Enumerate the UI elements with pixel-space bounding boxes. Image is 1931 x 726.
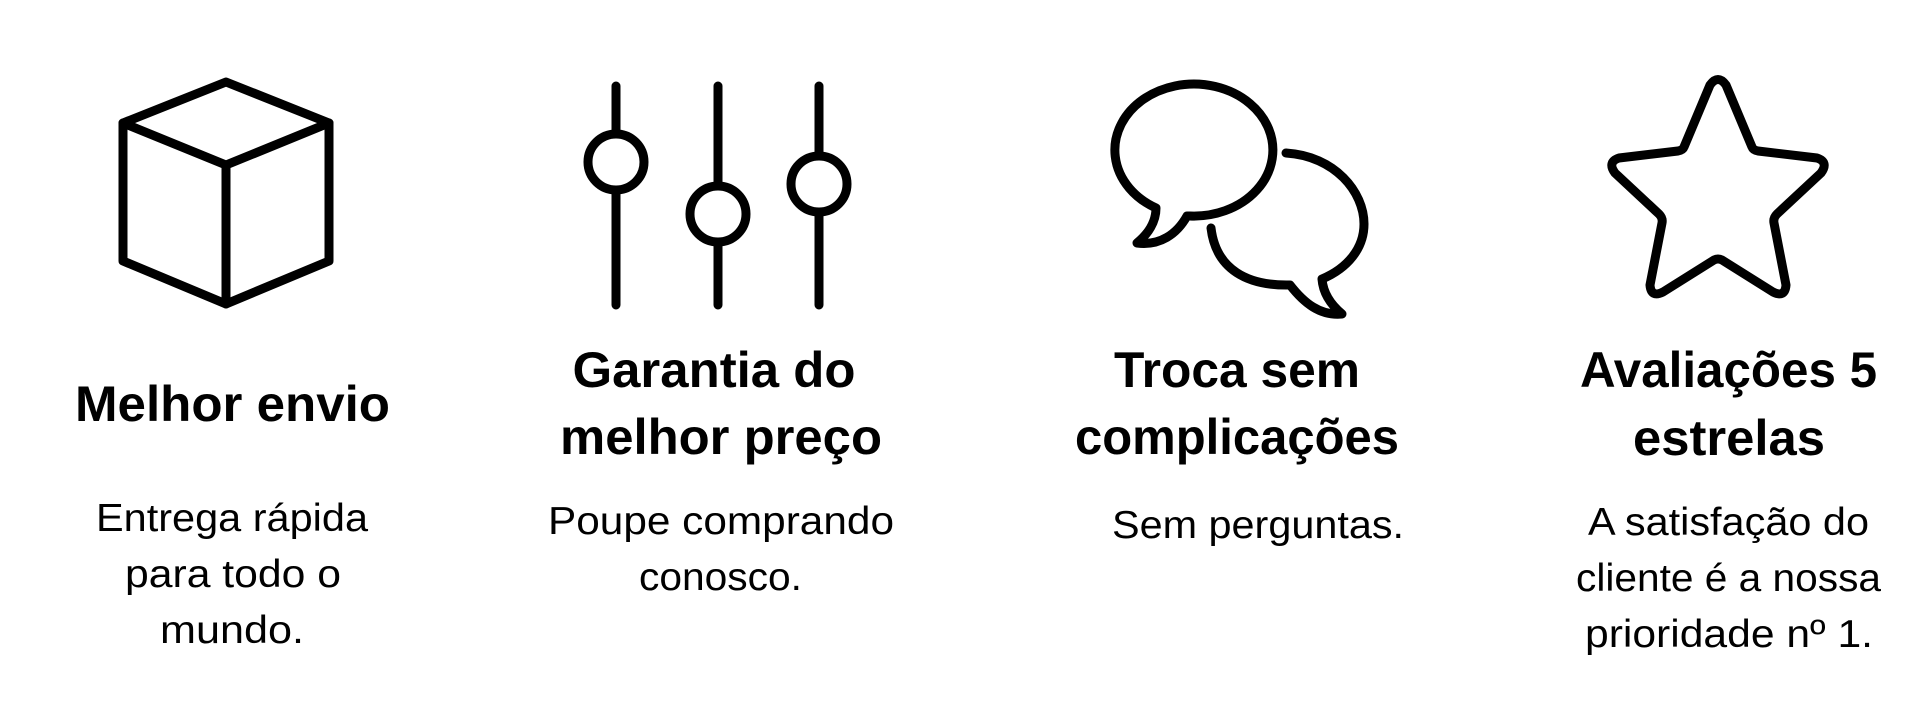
text: Entrega rápida para todo o mundo: Entrega rápida — [96, 497, 368, 540]
text: Entrega rápida para todo o mundo: para todo o — [125, 553, 341, 596]
text: Entrega rápida para todo o mundo: mundo. — [160, 609, 304, 652]
panel: Melhor envio — [75, 82, 390, 652]
heading: Troca sem complicações — [1075, 342, 1399, 465]
text: A satisfação do cliente: A satisfação do — [1588, 501, 1869, 544]
text: A satisfação do cliente — [1576, 501, 1881, 656]
heading: Garantia do melhor preço: melhor preço — [560, 409, 882, 465]
icon: speech bubbles — [1115, 84, 1364, 314]
text: A satisfação do cliente: cliente é a nossa — [1576, 557, 1881, 600]
heading: Troca sem complicações: Troca sem — [1114, 342, 1360, 398]
heading: Garantia do melhor preço: Garantia do — [572, 342, 856, 398]
text: Entrega rápida para todo o mundo — [96, 497, 368, 652]
text: Poupe comprando conosco — [548, 500, 894, 599]
text: Poupe comprando conosco: Poupe comprando — [548, 500, 894, 543]
icon: sliders — [588, 86, 847, 305]
text: Sem perguntas: Sem perguntas. — [1112, 504, 1404, 547]
heading: Avaliações 5 estrelas: Avaliações 5 — [1580, 342, 1877, 398]
text: Poupe comprando conosco: conosco. — [639, 556, 802, 599]
heading: Avaliações 5 estrelas — [1580, 342, 1877, 466]
heading: Avaliações 5 estrelas: estrelas — [1633, 410, 1825, 466]
text: A satisfação do cliente: prioridade nº 1. — [1585, 613, 1873, 656]
panel: Troca sem complicações — [1075, 84, 1404, 547]
panel: Garantia do melhor preço — [548, 86, 894, 599]
heading: Garantia do melhor preço — [560, 342, 882, 465]
heading: Melhor envio: Melhor envio — [75, 376, 390, 432]
icon: star — [1612, 80, 1824, 294]
heading: Troca sem complicações: complicações — [1075, 409, 1399, 465]
panel: Avaliações 5 estrelas — [1576, 80, 1881, 656]
icon: box — [123, 82, 329, 304]
